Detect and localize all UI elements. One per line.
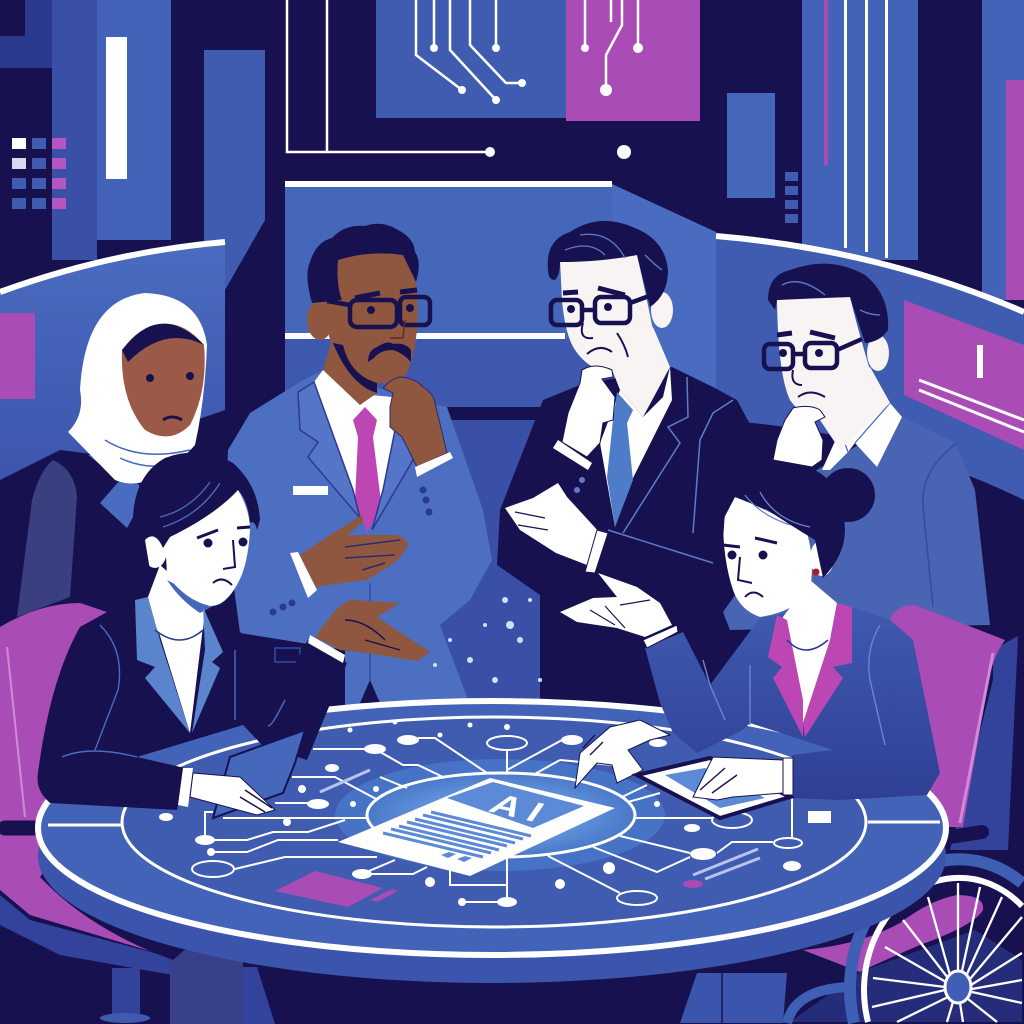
person: older man in sweater (723, 264, 990, 630)
document text lines (383, 812, 531, 857)
circuit nodes (159, 720, 831, 907)
stylus stripes (320, 770, 760, 879)
person: man in navy suit (497, 221, 755, 705)
table top (38, 701, 946, 955)
jacket (38, 600, 347, 810)
person: woman in hijab (0, 293, 230, 625)
pointing hand (575, 720, 670, 788)
person: seated woman left (38, 453, 430, 818)
circuit ring nodes (192, 736, 802, 905)
magenta pads (275, 871, 703, 907)
raised cuff (643, 625, 678, 648)
cuff (783, 758, 793, 795)
tablet (637, 758, 790, 818)
radial spokes (48, 822, 940, 825)
earring (812, 568, 820, 576)
chair: right magenta (850, 605, 1024, 1000)
hair (133, 453, 260, 570)
AI label: AI (483, 788, 559, 830)
shirt (148, 597, 205, 733)
central ring (367, 773, 635, 857)
person: man in blue suit with pink tie (225, 224, 492, 705)
hair (713, 464, 845, 578)
lapels (768, 615, 803, 737)
tablet (213, 730, 305, 818)
document header (447, 782, 584, 828)
open palm hand (315, 600, 430, 661)
bun (821, 468, 875, 522)
lapels (135, 597, 190, 733)
circuit traces on table (205, 738, 792, 902)
inner ring (122, 717, 866, 927)
hand on tablet (190, 773, 275, 815)
facial features (723, 538, 777, 597)
chair: left magenta with seat and base (0, 603, 275, 1024)
table underside (38, 729, 946, 983)
sparkle particles rising from document (433, 597, 542, 683)
wheelchair with seat, frame and spoked wheel (787, 859, 1022, 1023)
hand on tablet (693, 757, 783, 800)
AI document (338, 778, 615, 876)
round table (38, 701, 946, 983)
person: seated woman right (560, 464, 940, 818)
palm up hand (560, 573, 672, 637)
jacket (645, 603, 940, 800)
neck (148, 565, 205, 647)
neck (783, 580, 837, 650)
facial features (197, 527, 250, 585)
raised cuff (308, 635, 345, 663)
face (723, 497, 812, 617)
shirt (787, 620, 832, 723)
legs under table (680, 970, 787, 1023)
central glow (335, 759, 665, 871)
cuff (178, 768, 193, 807)
document footer tags (441, 852, 472, 862)
face (165, 490, 250, 606)
